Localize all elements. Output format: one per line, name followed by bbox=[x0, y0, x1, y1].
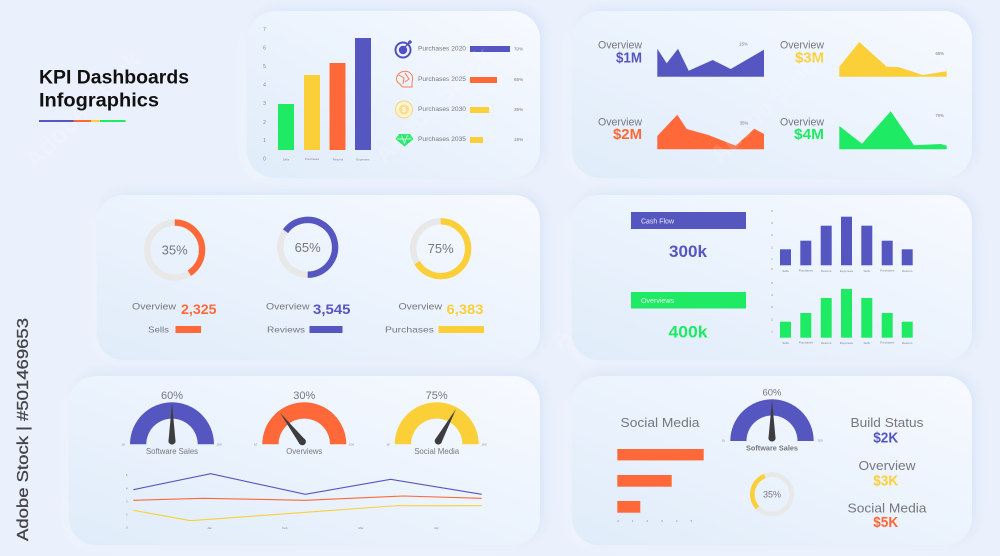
stat: overview: $3K bbox=[873, 472, 898, 490]
overview $1M: Overview bbox=[598, 40, 642, 52]
stat: overview: Overview bbox=[858, 459, 917, 473]
legend: purchases 2030 bbox=[418, 106, 523, 113]
bar chart: green: 4 bbox=[771, 293, 773, 297]
bar chart: sales by category: Purchases bbox=[305, 157, 320, 161]
bar chart: blue: 3 bbox=[771, 233, 773, 237]
title bbox=[39, 68, 189, 122]
line chart: 2 bbox=[126, 513, 128, 517]
bar chart: green: 5 bbox=[771, 281, 773, 285]
line chart: Mar bbox=[358, 526, 364, 530]
panel: bar chart and purchases bbox=[247, 11, 540, 178]
donut 75% purchases: Purchases bbox=[385, 324, 434, 334]
watermark pattern: Adobe Stock bbox=[369, 406, 497, 534]
bar chart: sales by category bbox=[263, 27, 371, 162]
area chart: blue bbox=[657, 42, 764, 77]
bar chart: sales by category: Returns bbox=[333, 158, 344, 162]
horizontal bar chart: 0 bbox=[617, 519, 619, 523]
line chart: 4 bbox=[126, 486, 128, 490]
panel: overview area charts bbox=[572, 11, 972, 178]
watermark pattern: Adobe Stock bbox=[544, 226, 672, 354]
legend: purchases 2030: Purchases 2030 bbox=[418, 106, 466, 113]
overview $2M: $2M bbox=[613, 126, 642, 143]
overview $1M bbox=[598, 40, 642, 66]
donut 35% sells: Sells bbox=[148, 324, 169, 334]
stat: overview bbox=[858, 459, 917, 490]
heading: social media: Social Media bbox=[620, 416, 700, 430]
title: Infographics bbox=[39, 90, 159, 112]
gauge: social media 75%: 100 bbox=[481, 442, 487, 446]
gauge: overviews 30% bbox=[254, 390, 354, 456]
bar chart: green: 2 bbox=[771, 318, 773, 322]
donut 35% bbox=[744, 467, 800, 522]
overview $3M bbox=[780, 40, 824, 66]
gauge: social media 75% bbox=[386, 390, 487, 456]
legend: purchases 2035: 15% bbox=[514, 137, 523, 142]
panel: cash flow bbox=[572, 195, 972, 360]
bar chart: blue: Expenses bbox=[840, 269, 854, 273]
bar chart: blue: 4 bbox=[771, 221, 773, 225]
gauge: overviews 30%: 100 bbox=[349, 442, 354, 446]
donut 65% reviews: 65% bbox=[295, 240, 321, 255]
donut 35% sells: 2,325 bbox=[181, 302, 217, 317]
legend: purchases 2035: Purchases 2035 bbox=[418, 136, 466, 143]
value 300k: 300k bbox=[669, 242, 708, 261]
line chart: 5 bbox=[126, 473, 128, 477]
line chart bbox=[126, 473, 482, 530]
bar chart: blue: Purchases bbox=[880, 268, 895, 272]
line chart: 3 bbox=[126, 499, 128, 503]
legend: purchases 2020: 70% bbox=[514, 46, 523, 52]
watermark pattern: Adobe Stock bbox=[704, 406, 832, 534]
watermark pattern: Adobe Stock bbox=[54, 396, 182, 524]
legend: purchases 2025: 65% bbox=[514, 77, 523, 82]
bar chart: sales by category: 5 bbox=[263, 64, 266, 70]
overview $1M: $1M bbox=[616, 50, 642, 66]
legend: purchases 2035 bbox=[418, 136, 523, 143]
bar chart: sales by category: 3 bbox=[263, 101, 266, 107]
overviews banner bbox=[631, 292, 746, 308]
overview $2M: Overview bbox=[598, 116, 642, 128]
area chart: blue: 15% bbox=[739, 42, 748, 46]
bar chart: blue: Returns bbox=[821, 269, 832, 273]
stat: social media: $5K bbox=[873, 514, 898, 531]
icon: brain heads bbox=[397, 71, 413, 87]
bar chart: green: Returns bbox=[902, 341, 913, 345]
donut 75% purchases: 6,383 bbox=[446, 302, 484, 317]
panel: donut KPIs bbox=[97, 195, 540, 360]
donut 65% reviews: Overview bbox=[266, 302, 310, 312]
gauge: overviews 30%: 30% bbox=[293, 390, 316, 402]
horizontal bar chart: 2 bbox=[646, 519, 648, 523]
donut 75% purchases: Overview bbox=[398, 302, 443, 312]
stock id label: Adobe Stock | #501469653 bbox=[15, 318, 32, 541]
bar chart: green bbox=[771, 281, 913, 345]
bar chart: green: Purchases bbox=[799, 340, 813, 344]
gauge: social media 75%: Social Media bbox=[414, 447, 460, 456]
icon: target bbox=[396, 40, 412, 58]
gauge: software sales 60%: Software Sales bbox=[746, 446, 798, 452]
icon: diamond bbox=[396, 134, 414, 146]
watermark pattern: Adobe Stock bbox=[704, 41, 832, 169]
horizontal bar chart: 5 bbox=[690, 519, 692, 523]
title: KPI Dashboards bbox=[39, 68, 189, 88]
donut 35%: 35% bbox=[763, 490, 781, 500]
bar chart: sales by category: 4 bbox=[263, 82, 266, 88]
bar chart: blue: 1 bbox=[771, 257, 773, 261]
line chart: Jan bbox=[207, 526, 212, 530]
line chart: 0 bbox=[126, 526, 128, 530]
watermark pattern: Adobe Stock bbox=[209, 226, 337, 354]
bar chart: blue: 5 bbox=[771, 209, 773, 213]
gauge: software sales 60%: 100 bbox=[216, 442, 222, 446]
stat: build status: Build Status bbox=[850, 416, 924, 430]
stat: build status bbox=[850, 416, 924, 446]
line chart: Feb bbox=[282, 526, 288, 530]
bar chart: green: Sells bbox=[864, 341, 871, 345]
icon: coin: $ bbox=[402, 107, 406, 114]
donut 65% reviews bbox=[266, 209, 351, 334]
area chart: orange bbox=[657, 115, 764, 149]
gauge: social media 75%: 75% bbox=[426, 390, 448, 402]
bar chart: green: 1 bbox=[771, 330, 773, 334]
horizontal bar chart: 1 bbox=[632, 519, 634, 523]
area chart: yellow bbox=[839, 42, 947, 77]
gauge: software sales 60%: 100 bbox=[817, 438, 823, 442]
horizontal bar chart: 3 bbox=[661, 519, 663, 523]
bar chart: blue bbox=[771, 209, 913, 273]
bar chart: green: Sells bbox=[782, 341, 789, 345]
overview $3M: Overview bbox=[780, 40, 824, 52]
bar chart: blue: Purchases bbox=[799, 268, 813, 272]
overview $4M: $4M bbox=[794, 126, 824, 143]
donut 65% reviews: 3,545 bbox=[313, 302, 351, 317]
gauge: software sales 60% bbox=[722, 388, 823, 452]
gauge: software sales 60%: 10 bbox=[722, 438, 725, 442]
gauge: social media 75%: 10 bbox=[386, 442, 390, 446]
stat: build status: $2K bbox=[873, 430, 898, 446]
donut 35% sells: 35% bbox=[162, 242, 188, 258]
panel: gauges and line chart bbox=[69, 376, 540, 545]
icon: coin bbox=[396, 101, 412, 118]
overview $4M bbox=[780, 116, 824, 143]
bar chart: blue: 0 bbox=[771, 267, 773, 271]
stat: social media bbox=[848, 502, 927, 531]
panel: social media summary bbox=[572, 376, 972, 545]
gauge: software sales 60%: Software Sales bbox=[146, 447, 198, 456]
overviews banner: Overviews bbox=[641, 298, 674, 305]
gauge: software sales 60%: 10 bbox=[121, 442, 125, 446]
bar chart: green: Returns bbox=[821, 341, 832, 345]
donut 35% sells bbox=[132, 223, 217, 334]
watermark pattern: Adobe Stock bbox=[19, 46, 147, 174]
horizontal bar chart bbox=[617, 449, 704, 523]
bar chart: blue: Sells bbox=[782, 269, 789, 273]
bar chart: green: Expenses bbox=[840, 341, 854, 345]
overview $4M: Overview bbox=[780, 116, 824, 128]
bar chart: sales by category: Expenses bbox=[356, 158, 370, 162]
gauge: software sales 60%: 60% bbox=[762, 388, 782, 398]
donut 35% sells: Overview bbox=[132, 302, 177, 312]
legend: purchases 2020 bbox=[418, 46, 523, 52]
area chart: green: 70% bbox=[936, 113, 944, 118]
bar chart: blue: 2 bbox=[771, 246, 773, 250]
bar chart: green: 3 bbox=[771, 305, 773, 309]
legend: purchases 2030: 35% bbox=[514, 107, 523, 112]
donut 75% purchases: 75% bbox=[428, 241, 454, 256]
value 400k: 400k bbox=[668, 322, 708, 342]
area chart: orange: 35% bbox=[740, 120, 748, 126]
bar chart: sales by category: 1 bbox=[263, 138, 266, 144]
horizontal bar chart: 4 bbox=[676, 519, 678, 523]
donut 65% reviews: Reviews bbox=[267, 324, 305, 334]
area chart: green bbox=[839, 111, 947, 149]
title underline bbox=[39, 120, 126, 122]
bar chart: sales by category: 6 bbox=[263, 46, 266, 52]
gauge: software sales 60% bbox=[121, 390, 222, 456]
bar chart: sales by category: Sells bbox=[283, 158, 290, 162]
bar chart: sales by category: 0 bbox=[263, 156, 266, 162]
bar chart: sales by category: 2 bbox=[263, 120, 266, 126]
gauge: overviews 30%: Overviews bbox=[286, 447, 322, 456]
gauge: software sales 60%: 60% bbox=[161, 390, 183, 402]
overview $3M: $3M bbox=[795, 50, 824, 66]
watermark pattern: Adobe Stock bbox=[864, 216, 992, 344]
legend: purchases 2025 bbox=[418, 76, 523, 83]
bar chart: blue: Returns bbox=[902, 269, 913, 273]
area chart: yellow: 65% bbox=[936, 51, 944, 56]
legend: purchases 2020: Purchases 2020 bbox=[418, 46, 466, 52]
donut 75% purchases bbox=[385, 221, 484, 334]
bar chart: sales by category: 7 bbox=[263, 27, 266, 33]
legend: purchases 2025: Purchases 2025 bbox=[418, 76, 466, 83]
cash flow banner bbox=[631, 212, 746, 229]
bar chart: blue: Sells bbox=[864, 269, 871, 273]
overview $2M bbox=[598, 116, 642, 143]
watermark pattern: Adobe Stock bbox=[369, 41, 497, 169]
stat: social media: Social Media bbox=[848, 502, 927, 516]
gauge: overviews 30%: 10 bbox=[254, 442, 257, 446]
cash flow banner: Cash Flow bbox=[641, 218, 675, 226]
line chart: Apr bbox=[434, 526, 439, 530]
bar chart: green: Purchases bbox=[880, 340, 895, 344]
